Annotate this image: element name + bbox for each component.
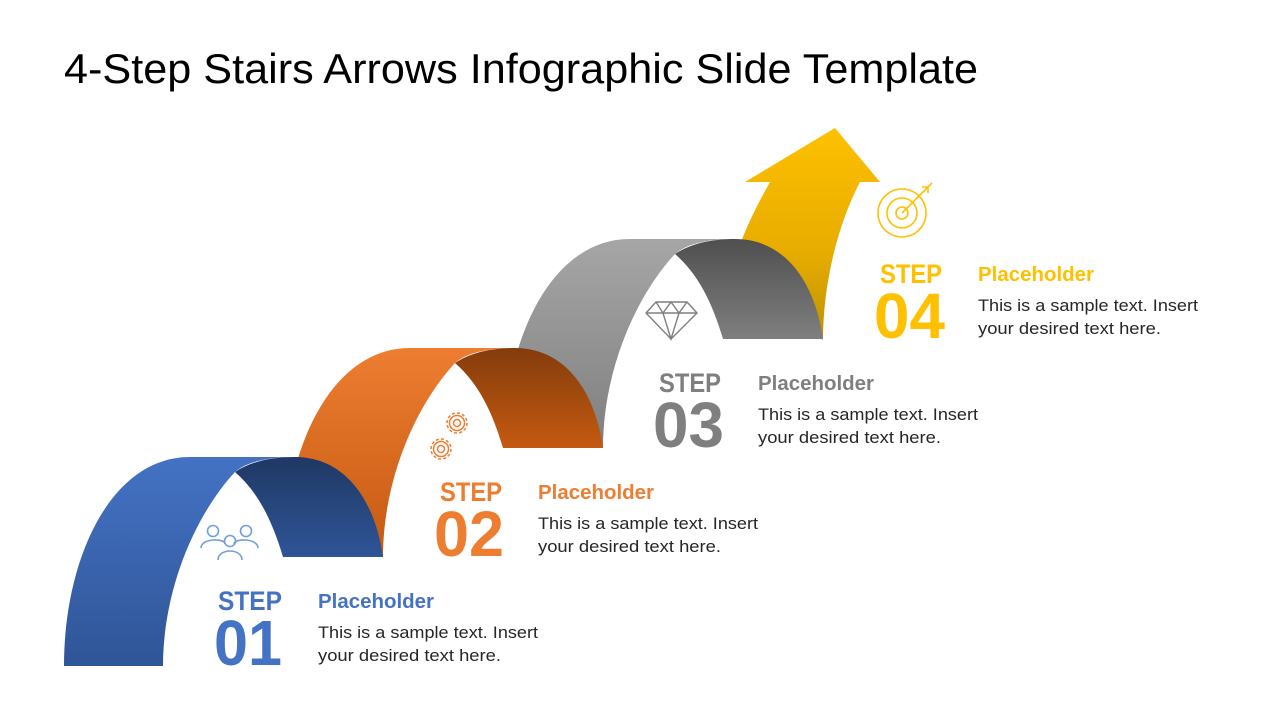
step 3 text: This is a sample text. Insert [758,405,978,424]
step 4 text: This is a sample text. Insert [978,296,1198,315]
step 4 text: your desired text here. [978,319,1161,338]
step 2 text [434,477,758,570]
step 4 text [874,259,1198,352]
step 1 text: STEP [218,586,282,616]
step 2 text: Placeholder [538,482,654,504]
step 4 text: Placeholder [978,264,1094,286]
title: 4-Step Stairs Arrows Infographic Slide Template [64,45,978,92]
step 2 text: 02 [434,498,504,570]
step 3 text: STEP [659,368,721,398]
arch: blue step 1 [64,457,383,666]
step 4 text: STEP [880,259,942,289]
arrow: yellow step 4 [738,128,880,340]
step 4 text: 04 [874,280,945,352]
step 2 text: This is a sample text. Insert [538,514,758,533]
step 3 text: 03 [653,389,724,461]
step 3 text: Placeholder [758,373,874,395]
step 1 text: your desired text here. [318,646,501,665]
icon: gears [431,413,467,459]
step 3 text: your desired text here. [758,428,941,447]
icon: target [878,183,932,237]
icon: diamond [646,302,697,339]
arch: gray step 3 [504,239,823,448]
icon: people [201,526,258,560]
step 1 text: Placeholder [318,591,434,613]
step 1 text: 01 [214,607,282,679]
arch: orange step 2 [284,348,603,557]
step 1 text [214,586,538,679]
step 2 text: STEP [440,477,502,507]
step 1 text: This is a sample text. Insert [318,623,538,642]
step 3 text [653,368,978,461]
step 2 text: your desired text here. [538,537,721,556]
